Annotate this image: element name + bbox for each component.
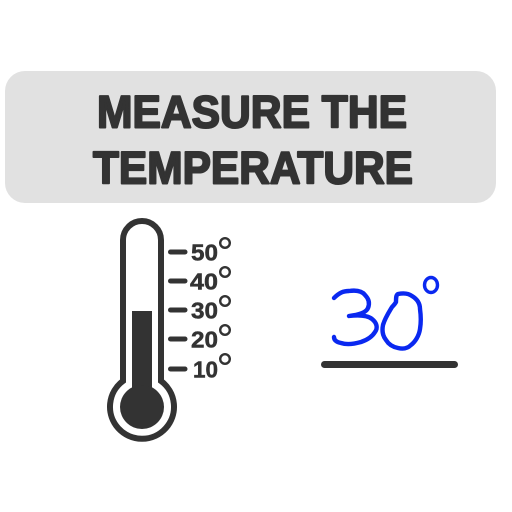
banner background: [5, 71, 496, 203]
handwritten degree symbol: [424, 278, 438, 292]
temperature scale: [170, 238, 230, 382]
thermometer icon: [110, 221, 174, 439]
scale mark 20: [170, 325, 230, 352]
scale mark 10: 10: [193, 356, 218, 382]
thermometer outline: [110, 221, 174, 439]
handwritten digit 0: [382, 293, 421, 349]
handwritten reading: 30 degrees: [334, 278, 438, 349]
title banner: [5, 71, 496, 203]
scale mark 30: 30: [191, 298, 218, 324]
handwritten digit 3: [334, 291, 377, 344]
scale mark 20: 20: [191, 326, 218, 352]
scale mark 40: [170, 267, 230, 294]
mercury column: [132, 311, 152, 391]
scale mark 30: [170, 296, 230, 324]
scale mark 10: [170, 354, 230, 382]
title line 2: TEMPERATURE: [93, 142, 413, 194]
title line 1: MEASURE THE: [97, 86, 407, 138]
scale mark 50: 50: [191, 240, 218, 266]
scale mark 50: [170, 238, 230, 266]
mercury bulb: [120, 385, 164, 429]
scale mark 40: 40: [190, 268, 218, 294]
answer underline: [324, 361, 454, 368]
